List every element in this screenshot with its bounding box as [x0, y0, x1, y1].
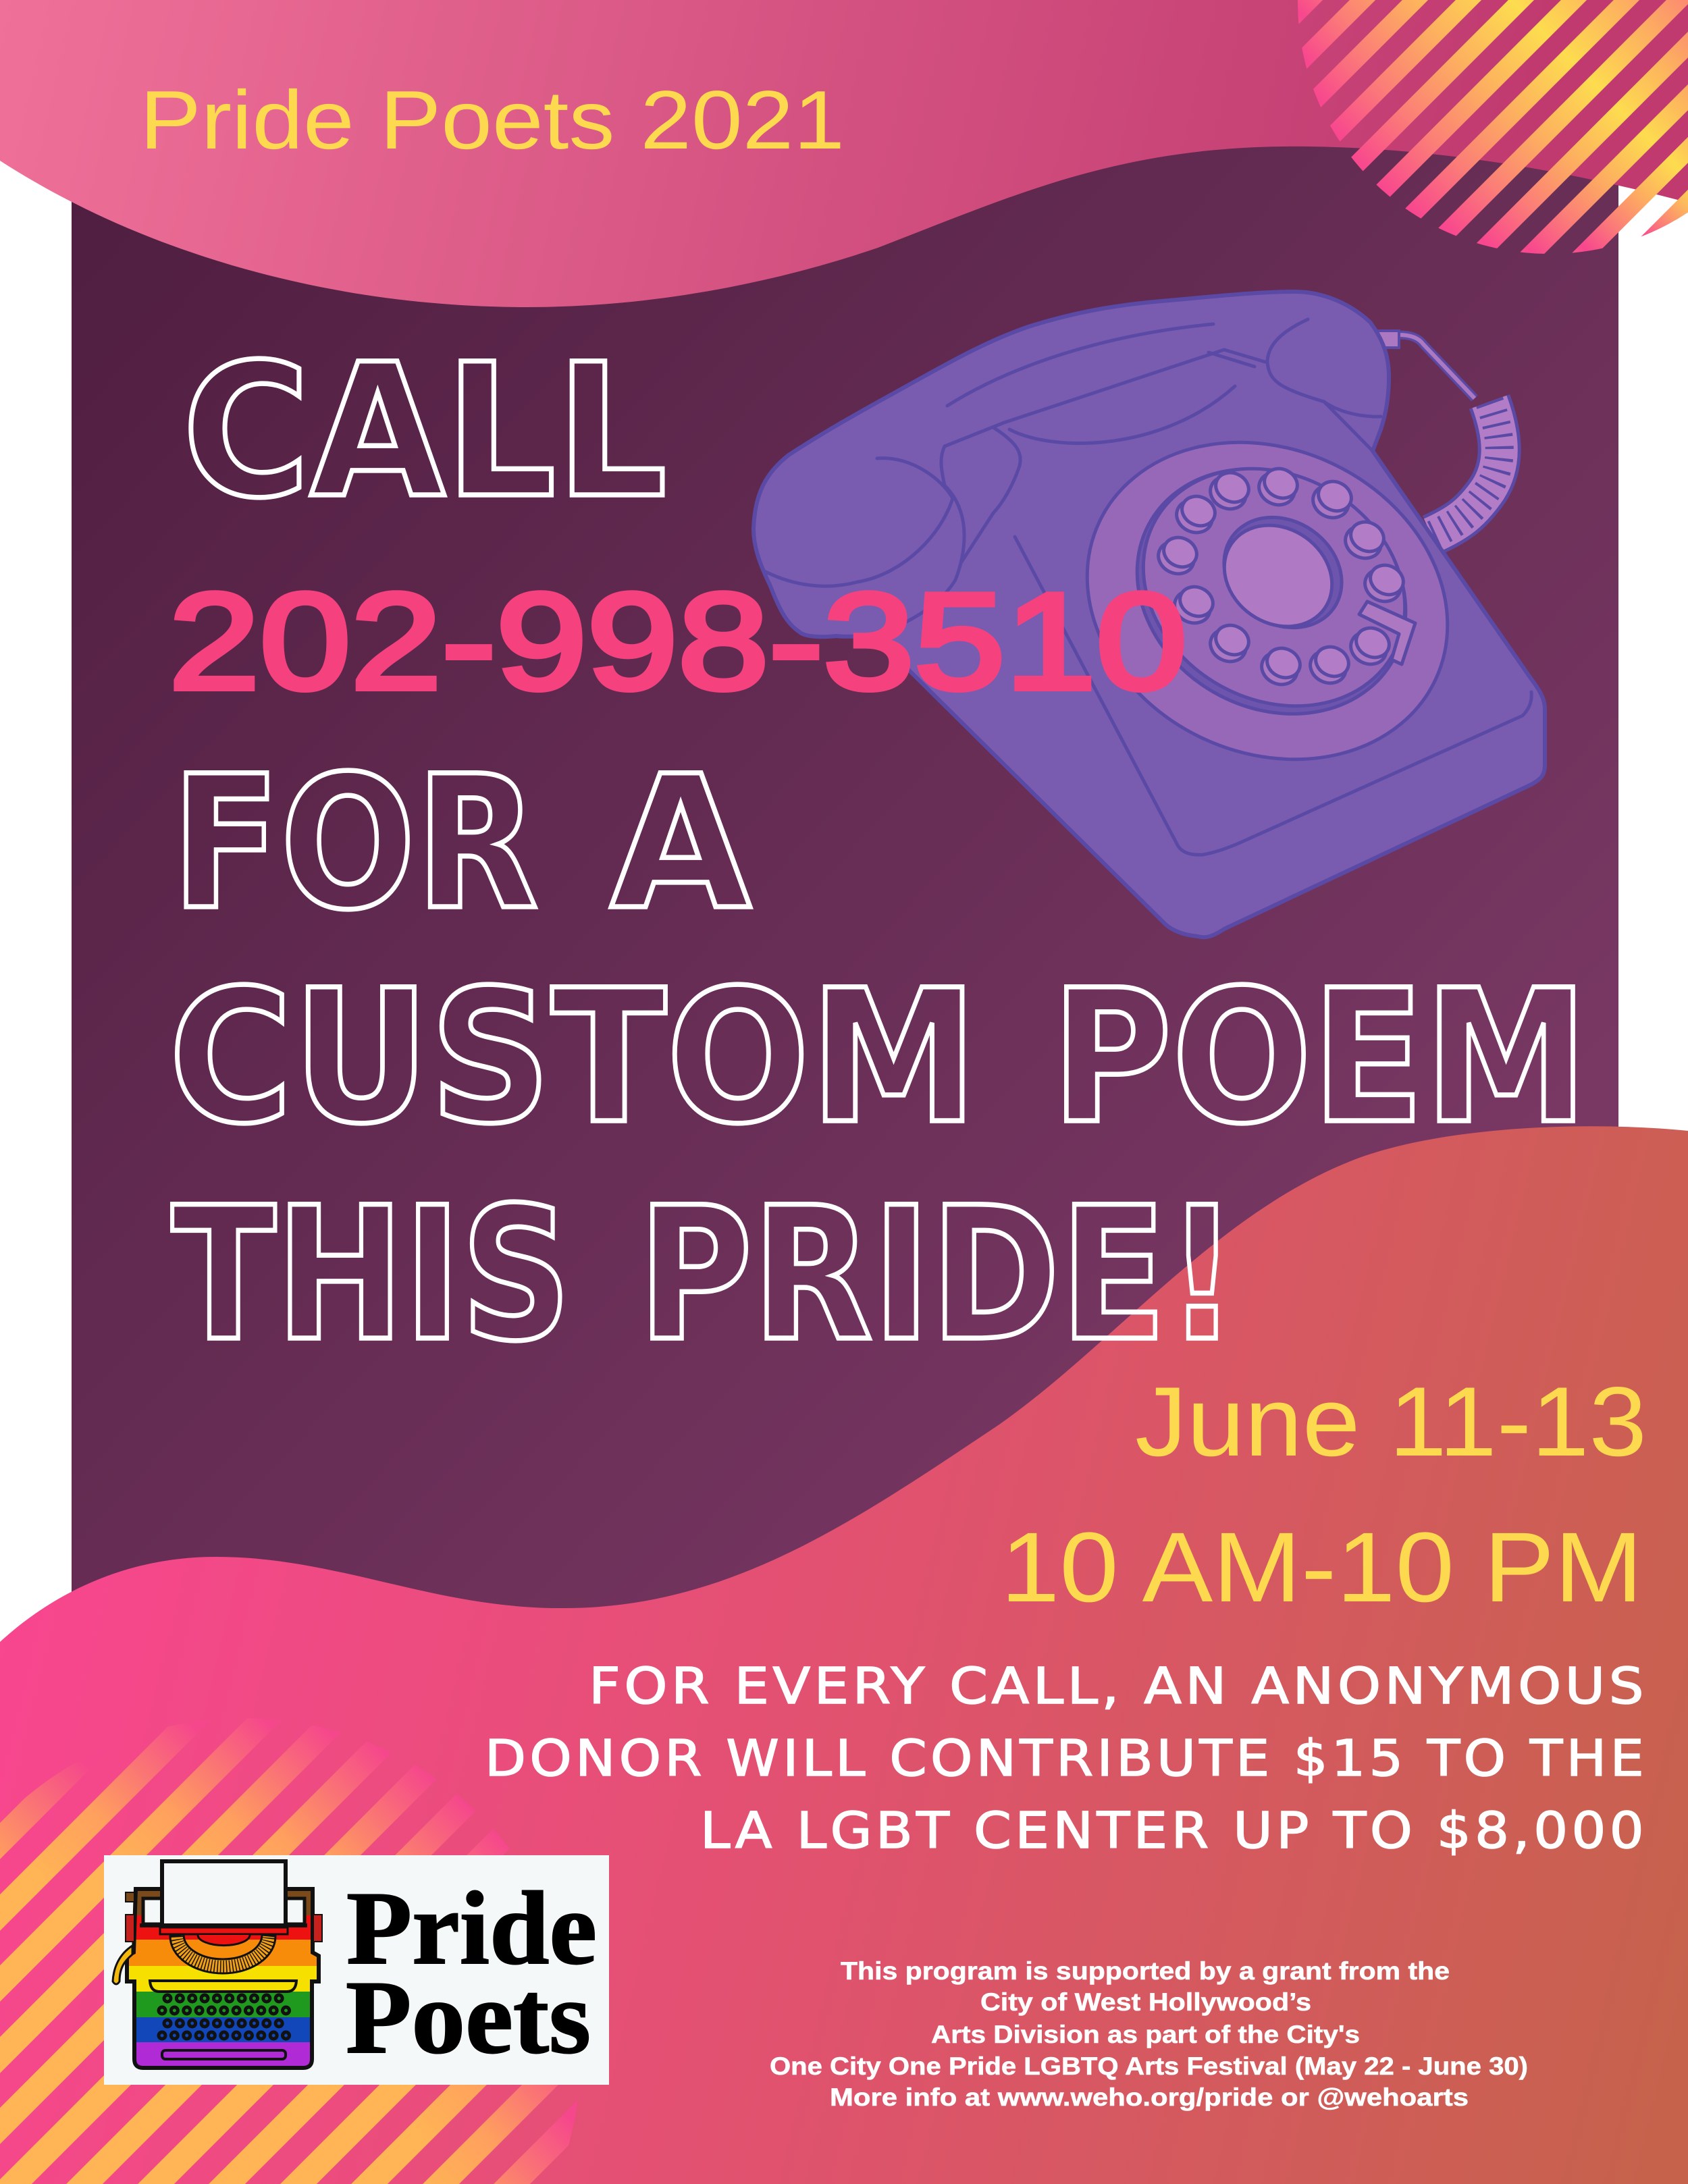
- rotary dial face: [1100, 422, 1448, 753]
- phone body: [754, 292, 1545, 937]
- credits text block: This program is supported by a grant from the: [841, 1957, 1450, 1985]
- bottom left striped circle: [0, 1720, 578, 2184]
- credits text block: [770, 1957, 1528, 2111]
- top wave: [0, 0, 1688, 307]
- donation text: DONOR WILL CONTRIBUTE $15 TO THE: [485, 1730, 1647, 1788]
- phone detail lines: [764, 319, 1531, 855]
- dial centre: [1203, 495, 1363, 650]
- logo wordmark: Pride: [346, 1870, 597, 1986]
- date: June 11-13: [1135, 1366, 1647, 1476]
- heading: CUSTOM POEM: [169, 951, 1588, 1165]
- heading: FOR A: FOR: [172, 737, 538, 951]
- credits text block: One City One Pride LGBTQ Arts Festival (May 22 - June 30): [770, 2052, 1528, 2080]
- rotary dial rim: [1092, 421, 1450, 762]
- credits text block: Arts Division as part of the City's: [931, 2021, 1360, 2048]
- finger stop: [1359, 602, 1415, 664]
- heading: FOR A: A: [610, 737, 752, 951]
- heading: CUSTOM POEM: CUSTOM: [169, 951, 978, 1165]
- logo: Pride Poets: [104, 1855, 609, 2085]
- logo wordmark: Poets: [346, 1959, 591, 2075]
- dial finger holes: [1153, 463, 1408, 690]
- phone cord: [1374, 331, 1500, 535]
- logo wordmark: [346, 1870, 597, 2075]
- donation text: LA LGBT CENTER UP TO $8,000: [700, 1802, 1647, 1860]
- donation text: FOR EVERY CALL, AN ANONYMOUS: [589, 1657, 1647, 1715]
- heading: CUSTOM POEM: POEM: [1051, 951, 1588, 1165]
- heading: THIS PRIDE!: THIS: [172, 1169, 571, 1382]
- title: Pride Poets 2021: [140, 74, 845, 167]
- heading: CALL: CALL: [182, 325, 667, 539]
- donation text: [485, 1657, 1647, 1860]
- rotary dial plate: [1035, 385, 1500, 817]
- icon: rotary telephone: [754, 292, 1545, 937]
- heading: THIS PRIDE!: PRIDE!: [638, 1169, 1238, 1382]
- top right striped circle: [1298, 0, 1688, 254]
- phone number: 202-998-3510: [169, 565, 1187, 718]
- time: 10 AM-10 PM: [1001, 1512, 1643, 1623]
- bottom wave: [0, 1126, 1688, 2184]
- panel: dark purple background: [72, 81, 1618, 1661]
- icon: rainbow typewriter: [113, 1861, 324, 2068]
- credits text block: City of West Hollywood’s: [980, 1988, 1311, 2016]
- credits text block: More info at www.weho.org/pride or @wehoarts: [830, 2083, 1469, 2111]
- heading: THIS PRIDE!: [172, 1169, 1238, 1382]
